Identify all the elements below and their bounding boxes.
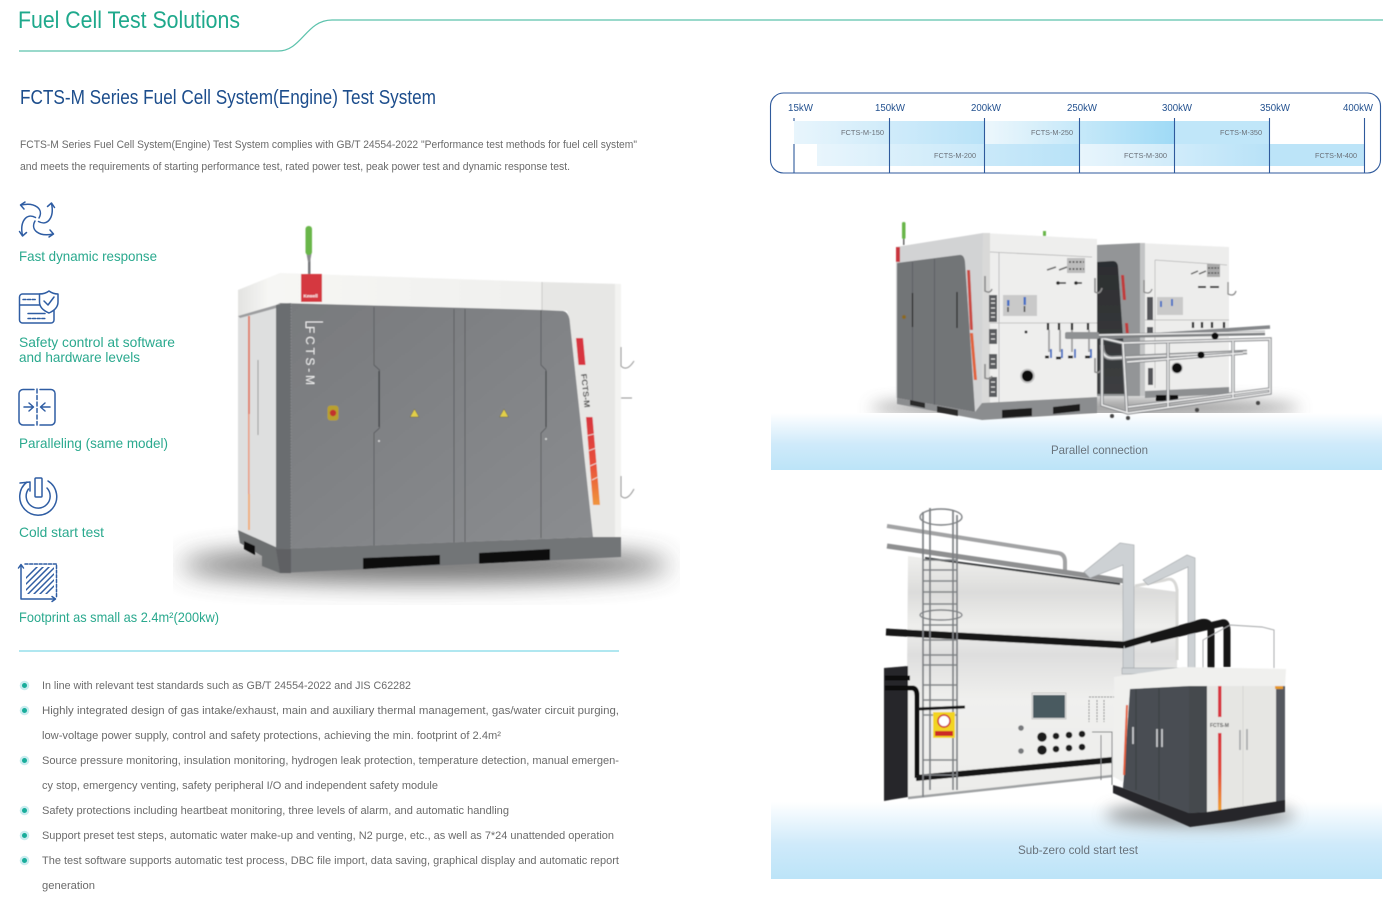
intro paragraph — [20, 139, 637, 173]
bullet 5: Support preset test steps, automatic water make-up and venting, N2 purge, etc., as well as 7*24 unattended operation — [42, 830, 614, 842]
black insulated pipes — [886, 622, 1227, 778]
power labels: 350kW — [1260, 103, 1291, 114]
bullet 3 — [20, 755, 619, 792]
left side face — [238, 305, 276, 549]
icon: hatched footprint — [18, 564, 56, 602]
side connection rack — [1089, 697, 1114, 785]
unit stripe — [1218, 686, 1222, 717]
casters — [1110, 401, 1260, 420]
vertical model label: FCTS-M — [303, 326, 317, 385]
product illustration: FCTS-M unit — [180, 226, 670, 582]
model labels: FCTS-M-300 — [1124, 151, 1167, 160]
caption: Parallel connection — [1051, 443, 1148, 457]
rear pipes — [1102, 345, 1247, 358]
bullet 1: In line with relevant test standards such as GB/T 24554-2022 and JIS C62282 — [42, 680, 411, 692]
base pallet — [280, 537, 621, 573]
power labels — [788, 103, 1374, 114]
floor shadow — [870, 399, 1300, 417]
side stripes — [576, 338, 600, 505]
cable ports — [1018, 725, 1085, 755]
warning sign — [933, 712, 955, 738]
side stripes: FCTS-M — [579, 373, 592, 408]
guard rail — [1203, 625, 1274, 668]
dark corner strip — [276, 303, 291, 549]
feature: paralleling — [19, 389, 168, 451]
front unit — [896, 222, 1102, 420]
feature: safety control: and hardware levels — [19, 349, 140, 365]
door seams — [374, 307, 546, 546]
ground shadow — [180, 548, 670, 582]
stainless manifold frame — [1065, 327, 1270, 420]
terminal plate — [1067, 258, 1085, 273]
bullet 6: The test software supports automatic test process, DBC file import, data saving, graphical display and automatic report — [42, 855, 619, 867]
vent window — [1003, 295, 1037, 316]
feature: fast dynamic response: Fast dynamic response — [19, 248, 157, 264]
beacon — [306, 226, 312, 274]
emergency button — [328, 406, 338, 420]
beacon — [902, 222, 906, 239]
panel: parallel connection — [771, 222, 1382, 470]
side hooks — [621, 347, 634, 498]
intro paragraph: FCTS-M Series Fuel Cell System(Engine) Test System complies with GB/T 24554-2022 "Performance test methods for fuel cell system" — [20, 139, 637, 151]
power labels: 250kW — [1067, 103, 1098, 114]
chart frame — [770, 93, 1380, 173]
bullet 6 — [20, 855, 619, 892]
section heading: FCTS-M Series Fuel Cell System(Engine) Test System — [20, 87, 436, 109]
power labels: 200kW — [971, 103, 1002, 114]
model labels: FCTS-M-350 — [1220, 128, 1262, 137]
feature: safety control — [19, 291, 175, 365]
bullet 2 — [20, 705, 619, 742]
left base — [238, 530, 280, 573]
feature: fast dynamic response — [19, 202, 157, 264]
header rule with curve — [19, 20, 1383, 51]
bullet 2: Highly integrated design of gas intake/exhaust, main and auxiliary thermal management, gas/water circuit purging, — [42, 705, 619, 717]
model labels — [841, 128, 1357, 160]
icon: power with arrow — [20, 478, 57, 515]
observation window — [1032, 693, 1066, 719]
left refrigeration equipment — [884, 666, 917, 801]
caption band — [771, 413, 1382, 470]
power labels: 15kW — [788, 103, 814, 114]
test unit — [1113, 667, 1286, 827]
divider — [19, 650, 619, 652]
right white panel — [542, 282, 621, 537]
panel: sub-zero cold start — [771, 508, 1382, 879]
feature: safety control: Safety control at software — [19, 334, 175, 350]
bullet 3: Source pressure monitoring, insulation monitoring, hydrogen leak protection, temperature detection, manual emergen- — [42, 755, 619, 767]
rear unit — [1043, 231, 1236, 401]
bullet 6: generation — [42, 880, 95, 892]
icon: parallel brackets — [19, 389, 55, 425]
door handles — [1133, 727, 1162, 747]
feature: cold start test: Cold start test — [19, 524, 104, 540]
valves — [1024, 267, 1091, 358]
main pipe — [1065, 333, 1265, 336]
model labels: FCTS-M-400 — [1315, 151, 1357, 160]
power tick lines — [794, 118, 1364, 173]
model labels: FCTS-M-200 — [934, 151, 976, 160]
brand plate: Kewell — [304, 294, 318, 298]
floor shadow — [1105, 804, 1295, 826]
top white band — [238, 273, 542, 316]
gray front doors — [280, 303, 593, 549]
connector blocks — [989, 295, 997, 322]
brand plate — [301, 274, 322, 302]
power labels: 150kW — [875, 103, 906, 114]
model labels: FCTS-M-150 — [841, 128, 884, 137]
bottom service pipe — [908, 776, 1112, 798]
icon: pinwheel arrows — [20, 202, 54, 237]
feature: paralleling: Paralleling (same model) — [19, 435, 168, 451]
model labels: FCTS-M-250 — [1031, 128, 1073, 137]
power labels: 300kW — [1162, 103, 1193, 114]
feature: footprint — [18, 564, 219, 625]
feature: cold start test — [19, 478, 104, 540]
model bars — [794, 121, 1364, 166]
cage ladder — [920, 508, 962, 797]
unit label: FCTS-M — [1210, 723, 1229, 729]
frame tubes — [1102, 327, 1270, 413]
duct port — [1021, 370, 1034, 382]
overhead steel pipes — [887, 526, 1177, 660]
caption band — [771, 802, 1382, 879]
power labels: 400kW — [1343, 103, 1374, 114]
caption: Sub-zero cold start test — [1018, 843, 1139, 857]
plastic pallet — [1113, 785, 1285, 827]
feature: footprint: Footprint as small as 2.4m²(200kw) — [19, 609, 219, 625]
warning labels — [410, 409, 419, 417]
base — [897, 397, 1097, 420]
icon: card with shield — [20, 291, 58, 323]
intro paragraph: and meets the requirements of starting performance test, rated power test, peak power test and dynamic response test. — [20, 161, 570, 173]
side handles — [985, 276, 1102, 379]
bullet 4: Safety protections including heartbeat monitoring, three levels of alarm, and automatic handling — [42, 805, 509, 817]
bullet list — [20, 680, 619, 892]
black couplings — [1212, 332, 1218, 340]
bullet 2: low-voltage power supply, control and safety protections, achieving the min. footprint of 2.4m² — [42, 730, 501, 742]
page title: Fuel Cell Test Solutions — [18, 7, 240, 34]
bullet 3: cy stop, emergency venting, safety peripheral I/O and independent safety module — [42, 780, 438, 792]
power range chart — [770, 93, 1380, 173]
galvanized brackets — [1084, 543, 1195, 674]
vertical model label — [303, 322, 323, 385]
chamber wall — [906, 556, 1178, 797]
